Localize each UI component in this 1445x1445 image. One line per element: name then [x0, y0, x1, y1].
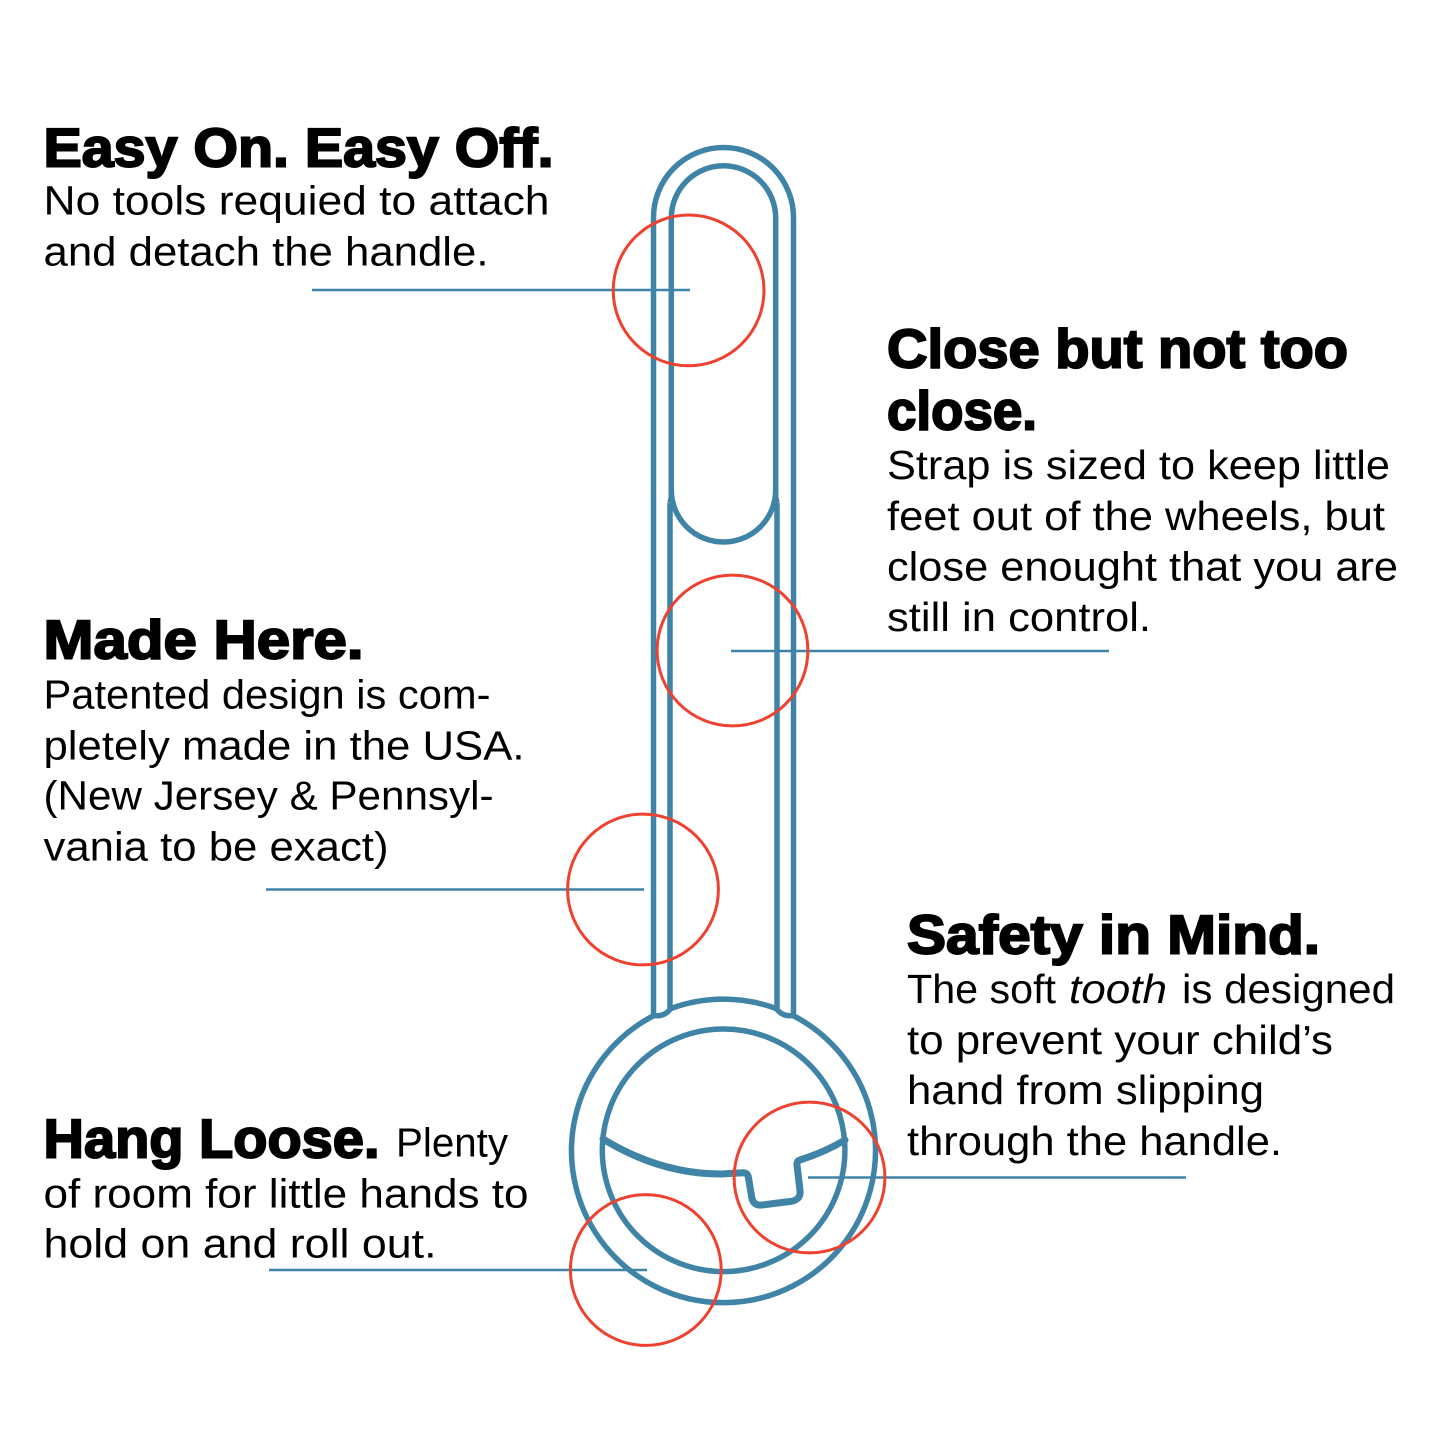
body text: Patented design is com- [44, 672, 491, 718]
diagram: stroller handle [572, 148, 876, 1303]
heading: Made Here. [44, 608, 364, 670]
leader line: close [731, 650, 1109, 652]
body text: Plenty [396, 1120, 508, 1166]
callout: hang loose [44, 1108, 528, 1266]
marker circle: close [657, 575, 808, 726]
body text [44, 178, 550, 274]
body text: hand from slipping [907, 1067, 1264, 1113]
callout: made here [44, 608, 524, 870]
leader line: made here [266, 888, 644, 891]
heading: Safety in Mind. [907, 904, 1320, 966]
body text: is designed [1182, 966, 1395, 1012]
body text [44, 1120, 528, 1266]
body text: through the handle. [907, 1118, 1282, 1164]
leader line: safety [808, 1176, 1186, 1179]
grip outer ring [572, 999, 876, 1303]
body text: tooth [1069, 966, 1167, 1012]
heading: Hang Loose. [44, 1108, 379, 1170]
soft tooth grip edge [603, 1139, 845, 1205]
body text: Strap is sized to keep little [887, 442, 1390, 488]
body text: (New Jersey & Pennsyl- [44, 772, 494, 818]
body text: and detach the handle. [44, 228, 489, 274]
callout: easy on easy off [44, 116, 554, 274]
body text: close enought that you are [887, 544, 1398, 590]
strap joins [654, 1008, 793, 1016]
heading [887, 318, 1348, 442]
body text: to prevent your child’s [907, 1017, 1333, 1063]
marker circle: hang loose [570, 1195, 721, 1345]
marker circle: made here [568, 814, 718, 965]
body text: vania to be exact) [44, 824, 388, 870]
body text [44, 672, 524, 870]
body text: The soft [907, 966, 1057, 1012]
body text [887, 442, 1398, 640]
body text: No tools requied to attach [44, 178, 550, 224]
heading: Easy On. Easy Off. [44, 116, 554, 178]
strap inner fold arc [671, 490, 776, 542]
grip inner ring [602, 1029, 845, 1272]
body text: hold on and roll out. [44, 1220, 436, 1266]
callout: close but not too close [887, 318, 1398, 640]
leader line: easy on [312, 289, 690, 291]
callout: safety in mind [907, 904, 1395, 1164]
body text: pletely made in the USA. [44, 722, 524, 768]
handle strap outer loop [654, 148, 794, 1015]
strap inner lower edges [670, 497, 777, 1008]
body text [907, 966, 1395, 1164]
marker circle: safety [734, 1102, 885, 1253]
body text: feet out of the wheels, but [887, 493, 1386, 539]
marker circle: easy on [613, 215, 764, 366]
heading: close. [887, 380, 1037, 442]
body text: still in control. [887, 594, 1151, 640]
body text: of room for little hands to [44, 1170, 528, 1216]
leader line: hang loose [269, 1269, 647, 1271]
heading: Close but not too [887, 318, 1348, 380]
handle strap inner loop [671, 166, 776, 500]
